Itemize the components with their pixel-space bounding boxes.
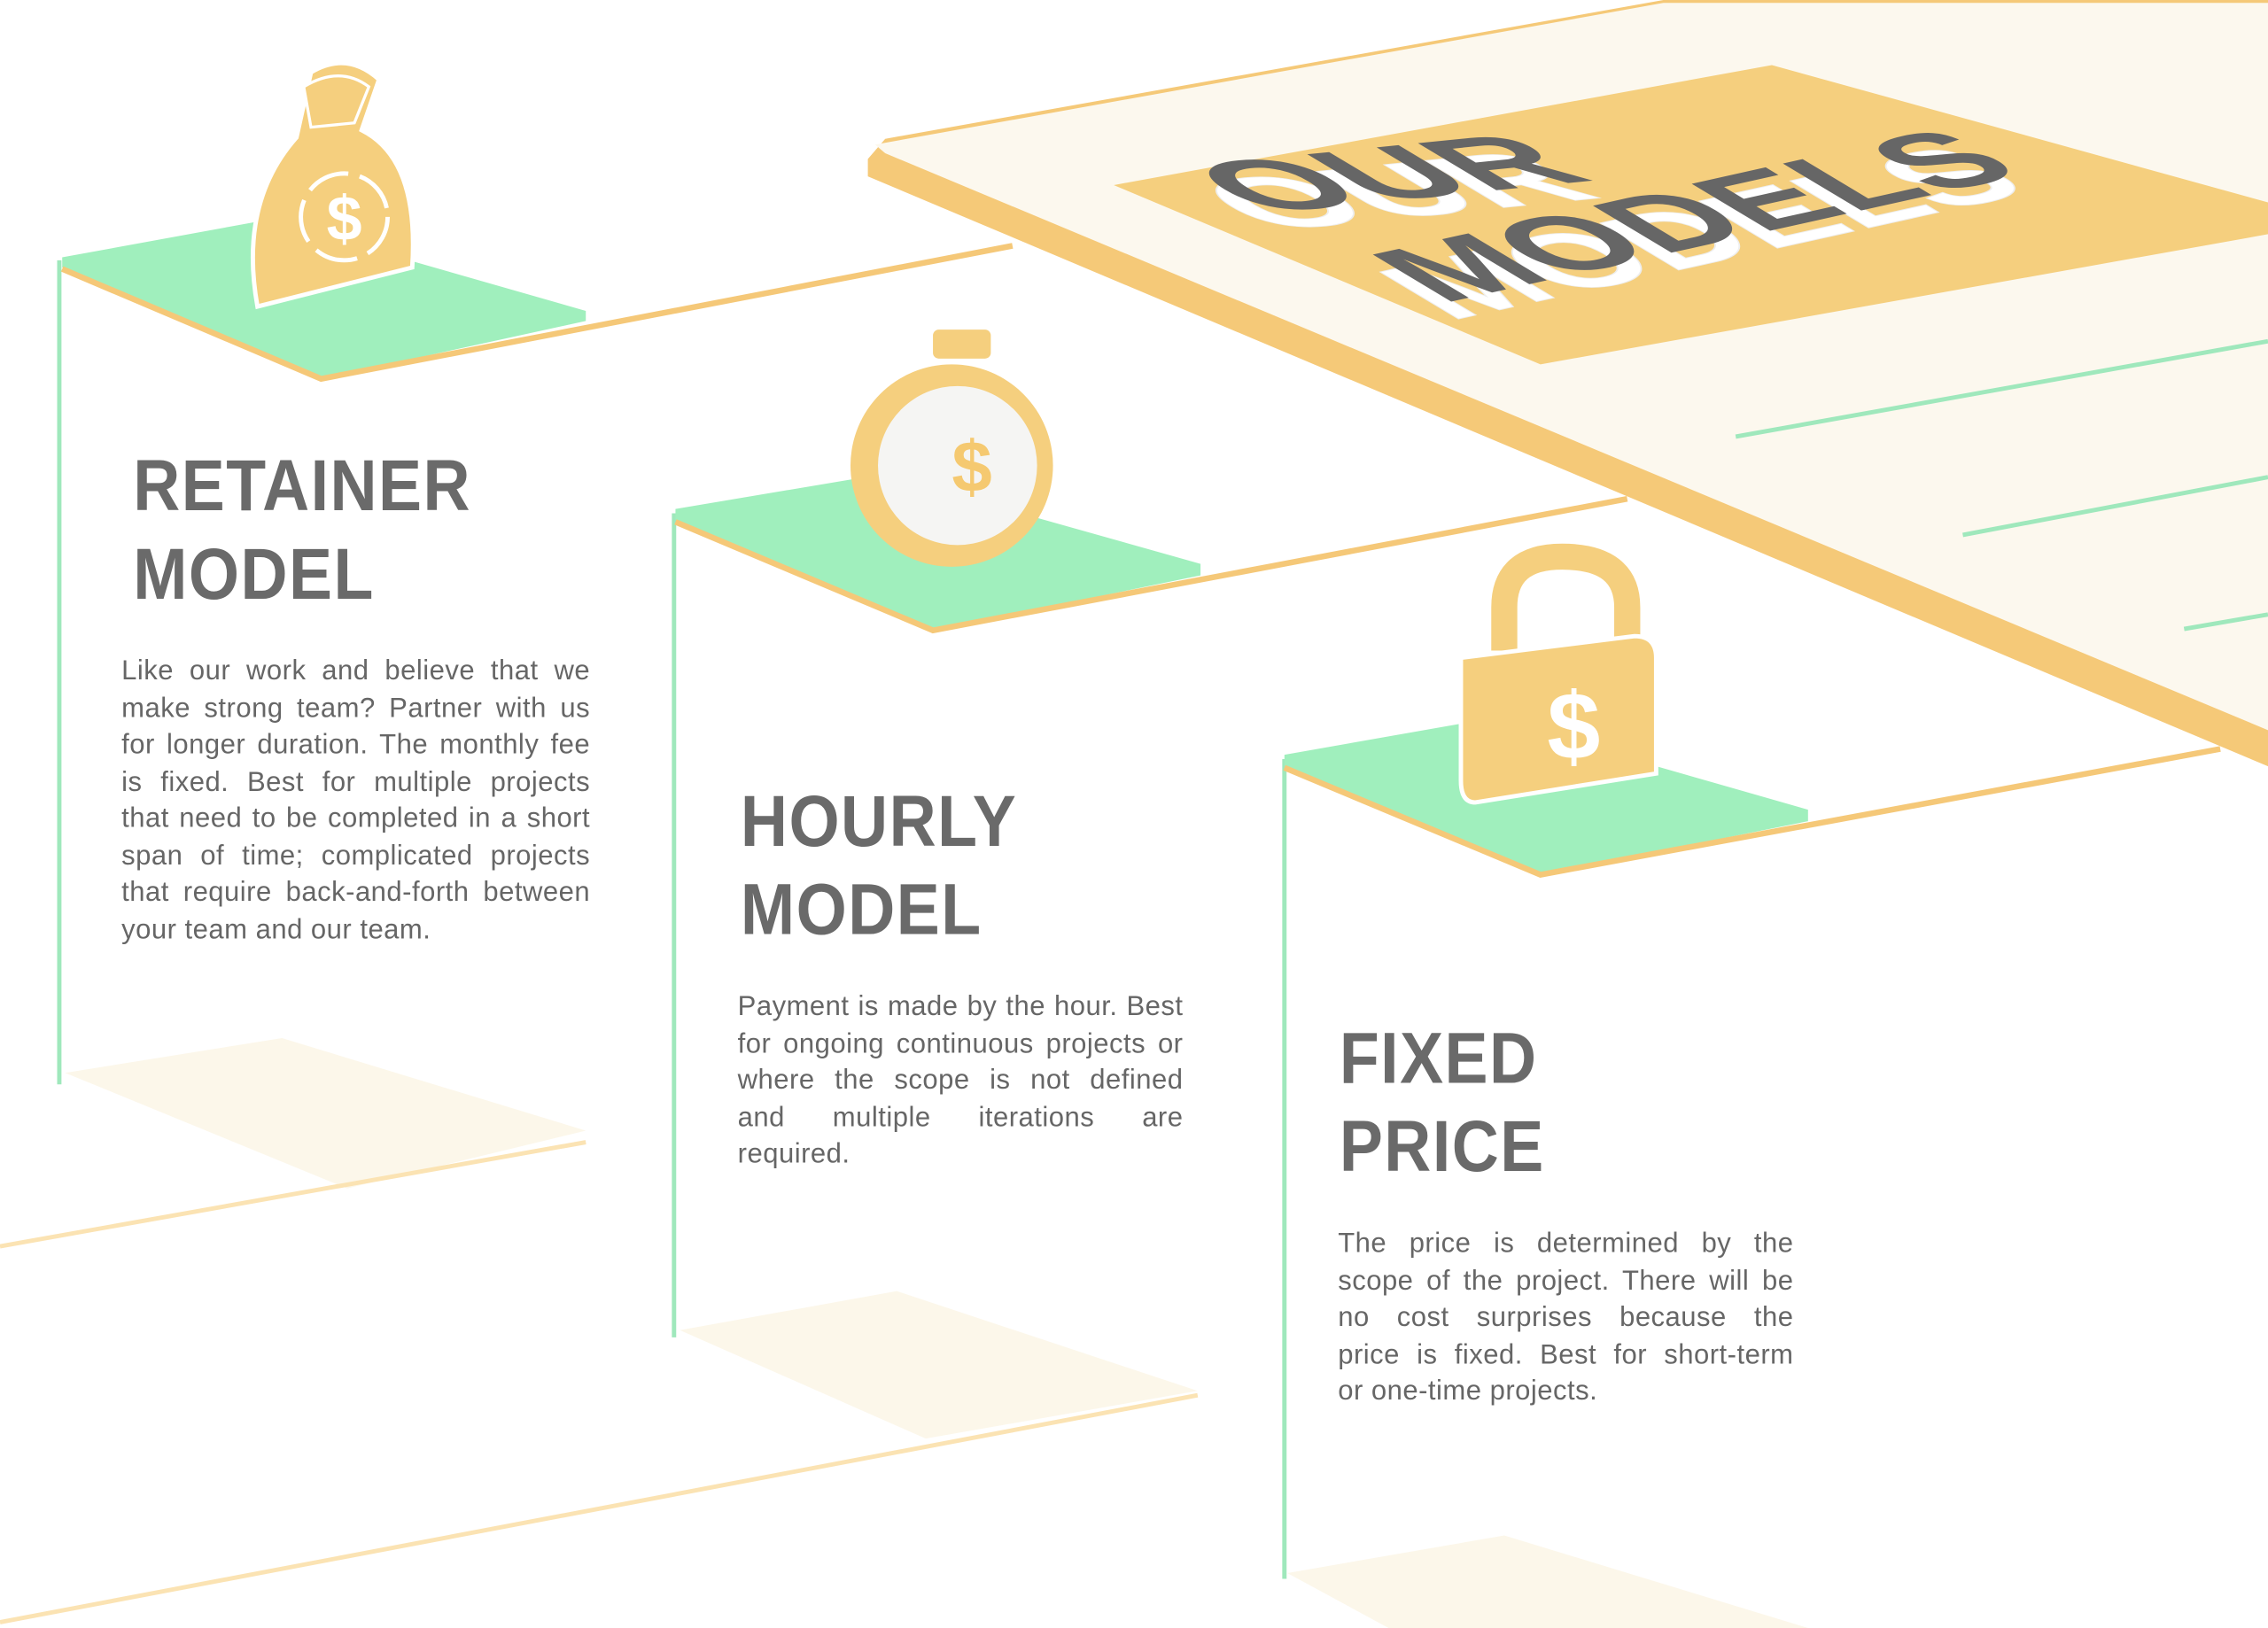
text block: retainer: Like our work and believe that we bbox=[121, 656, 590, 686]
icon: padlock: $ bbox=[1547, 672, 1600, 779]
text block: retainer: your team and our team. bbox=[121, 914, 431, 945]
text block: fixed: The price is determined by the bbox=[1338, 1229, 1793, 1260]
text block: retainer bbox=[121, 656, 590, 945]
heading: retainer model: MODEL bbox=[133, 533, 375, 615]
heading: retainer model: RETAINER bbox=[133, 446, 471, 526]
icon: money bag: $ bbox=[327, 183, 362, 254]
text block: hourly: where the scope is not defined bbox=[738, 1066, 1184, 1096]
text block: hourly: and multiple iterations are bbox=[738, 1103, 1184, 1133]
text block: hourly: required. bbox=[738, 1139, 850, 1170]
text block: fixed bbox=[1338, 1229, 1793, 1407]
text block: retainer: that need to be completed in a short bbox=[121, 804, 590, 834]
heading: hourly model bbox=[741, 780, 1017, 950]
icon: stopwatch bbox=[850, 329, 1053, 567]
title: OUR MODELS: OUR bbox=[1163, 136, 1627, 246]
heading: fixed price bbox=[1340, 1018, 1545, 1187]
title: OUR MODELS: OUR bbox=[1156, 119, 1620, 229]
step 2 platform bbox=[0, 474, 1627, 1622]
heading: hourly model: HOURLY bbox=[741, 780, 1017, 862]
text block: retainer: for longer duration. The monthly fee bbox=[121, 730, 590, 761]
text block: retainer: that require back-and-forth between bbox=[121, 878, 590, 908]
text block: fixed: scope of the project. There will be bbox=[1338, 1266, 1793, 1296]
heading: retainer model bbox=[133, 446, 471, 615]
step 1 platform bbox=[0, 220, 1013, 1246]
text block: hourly: Payment is made by the hour. Best bbox=[738, 992, 1184, 1022]
icon: money bag bbox=[252, 63, 413, 306]
title: OUR MODELS: MODELS bbox=[1347, 129, 2058, 336]
text block: retainer: span of time; complicated projects bbox=[121, 841, 590, 871]
text block: fixed: price is fixed. Best for short-term bbox=[1338, 1339, 1793, 1370]
heading: hourly model: MODEL bbox=[741, 869, 983, 950]
text block: fixed: or one-time projects. bbox=[1338, 1376, 1597, 1407]
heading: fixed price: FIXED bbox=[1340, 1018, 1538, 1099]
panel: board bbox=[868, 0, 2268, 766]
icon: padlock bbox=[1461, 556, 1656, 802]
title: OUR MODELS: MODELS bbox=[1340, 112, 2051, 318]
icon: stopwatch: $ bbox=[951, 427, 992, 508]
text block: retainer: make strong team? Partner with us bbox=[121, 694, 590, 724]
text block: hourly bbox=[737, 992, 1184, 1170]
text block: retainer: is fixed. Best for multiple projects bbox=[121, 767, 590, 797]
step 3 platform bbox=[1285, 718, 2220, 1628]
text block: fixed: no cost surprises because the bbox=[1338, 1303, 1793, 1333]
text block: hourly: for ongoing continuous projects or bbox=[738, 1028, 1184, 1059]
heading: fixed price: PRICE bbox=[1340, 1106, 1545, 1187]
